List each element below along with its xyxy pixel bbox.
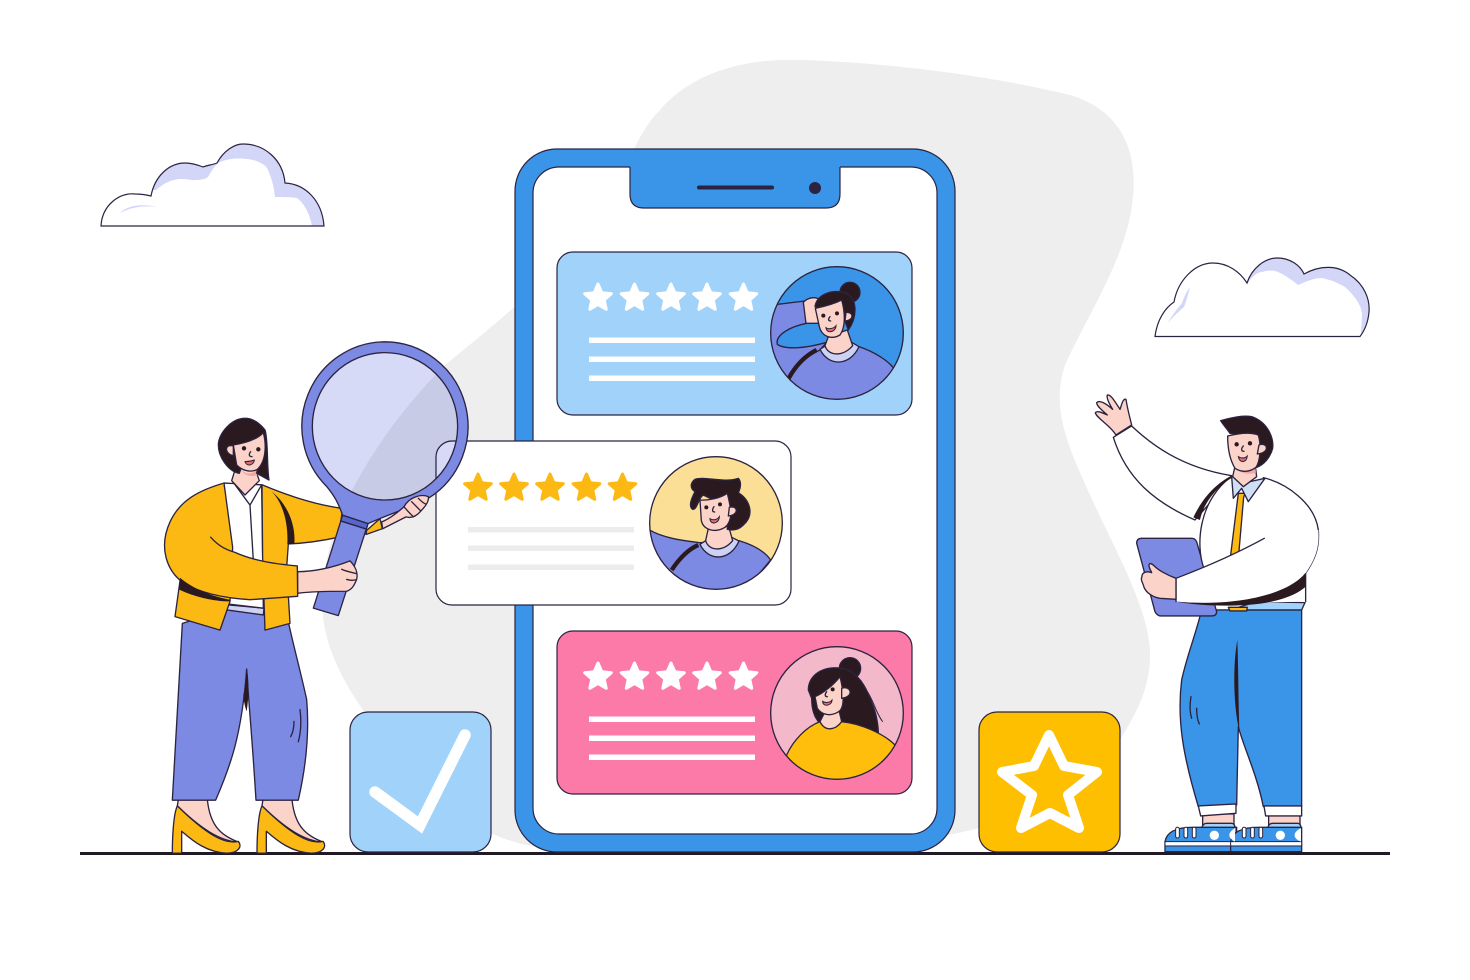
magnifying glass	[302, 342, 468, 616]
cloud: right	[1154, 257, 1370, 338]
checkbox tile	[350, 712, 491, 852]
near sleeve	[1176, 530, 1319, 606]
torso	[1193, 476, 1319, 603]
raised arm	[1113, 426, 1232, 520]
collar	[1232, 477, 1265, 502]
avatar: woman with long hair	[771, 647, 903, 787]
trousers	[1180, 610, 1302, 807]
near hand	[1141, 564, 1176, 599]
trousers	[172, 608, 308, 800]
phone notch	[630, 166, 840, 208]
far hand	[366, 496, 428, 534]
man with tablet	[1095, 395, 1319, 852]
review card: bottom	[557, 631, 912, 794]
cloud: left	[100, 143, 325, 227]
raised hand	[1095, 395, 1132, 435]
tablet	[1137, 538, 1217, 616]
text lines	[589, 338, 755, 381]
stars	[585, 663, 757, 688]
cuffs and socks	[1198, 804, 1302, 825]
far arm of jacket	[262, 485, 343, 630]
woman with magnifying glass	[165, 342, 468, 853]
stars	[465, 474, 636, 499]
avatar: man with wavy hair	[647, 457, 782, 597]
jacket and near sleeve	[165, 483, 298, 630]
shoes	[1165, 823, 1302, 852]
text lines	[468, 527, 634, 570]
tie tip	[1228, 607, 1247, 611]
review card: middle	[436, 441, 791, 605]
phone	[515, 149, 955, 852]
shirt and belt	[224, 481, 264, 615]
magnifier lens	[312, 352, 458, 500]
near hand	[298, 561, 357, 593]
ground line	[80, 852, 1390, 855]
background blob	[322, 60, 1150, 850]
text lines	[589, 716, 755, 760]
tie	[1231, 493, 1245, 555]
avatar: woman with bun	[763, 267, 903, 408]
shoes and legs	[172, 799, 325, 853]
stars	[585, 284, 757, 309]
woman head	[218, 418, 269, 495]
waistband	[1230, 602, 1305, 610]
star tile	[979, 712, 1120, 852]
head	[1221, 416, 1273, 487]
review card: top	[557, 252, 912, 415]
